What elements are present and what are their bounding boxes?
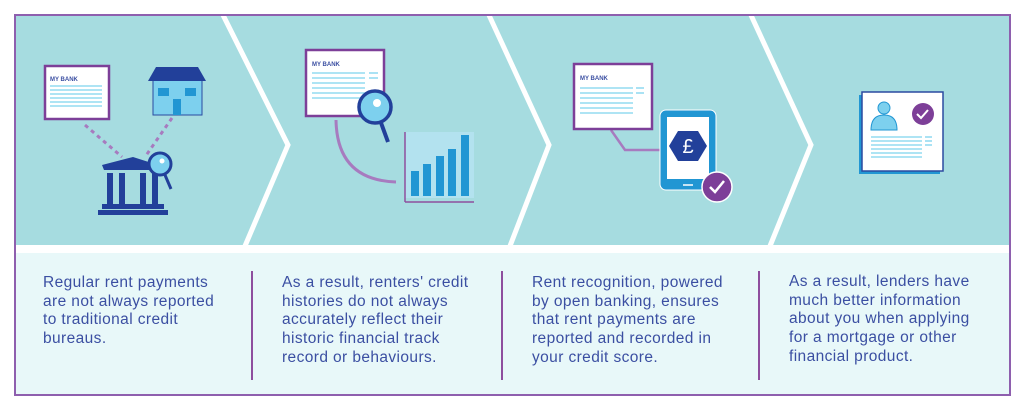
text: step 3: your credit score.: [532, 349, 658, 366]
text: step 1: [43, 274, 214, 347]
text: step 4: for a mortgage or other: [789, 329, 957, 346]
arrows: chevrons: [222, 13, 811, 246]
text: step 4: much better information: [789, 292, 961, 309]
icon: statement with chart: [306, 50, 474, 202]
text: step 2: record or behaviours.: [282, 349, 437, 366]
text: step 1: to traditional credit: [43, 311, 178, 328]
text: step 3: by open banking, ensures: [532, 293, 719, 310]
text: step 4: [789, 273, 970, 365]
text: step 2: histories do not always: [282, 293, 448, 310]
text: step 2: historic financial track: [282, 330, 440, 347]
icon: credit profile: [859, 92, 943, 174]
icon: open banking tablet: £: [682, 136, 694, 158]
text: step 1: bureaus.: [43, 330, 107, 347]
text: step 2: [282, 274, 468, 366]
icon: open banking tablet: [574, 64, 732, 202]
dividers: [252, 271, 759, 380]
text: step 3: reported and recorded in: [532, 330, 711, 347]
icon: open banking tablet: MY BANK: [580, 76, 609, 82]
text: step 1: are not always reported: [43, 293, 214, 310]
text: step 3: Rent recognition, powered: [532, 274, 723, 291]
text: step 3: [532, 274, 723, 366]
icon: bank and house: MY BANK: [50, 77, 79, 83]
text: step 2: accurately reflect their: [282, 311, 443, 328]
icon: statement with chart: MY BANK: [312, 62, 341, 68]
text: step 2: As a result, renters' credit: [282, 274, 468, 291]
text: step 1: Regular rent payments: [43, 274, 208, 291]
text: step 4: As a result, lenders have: [789, 273, 970, 290]
text: step 4: financial product.: [789, 348, 913, 365]
text: step 3: that rent payments are: [532, 311, 696, 328]
text: step 4: about you when applying: [789, 310, 970, 327]
icon: bank and house: [45, 66, 206, 215]
